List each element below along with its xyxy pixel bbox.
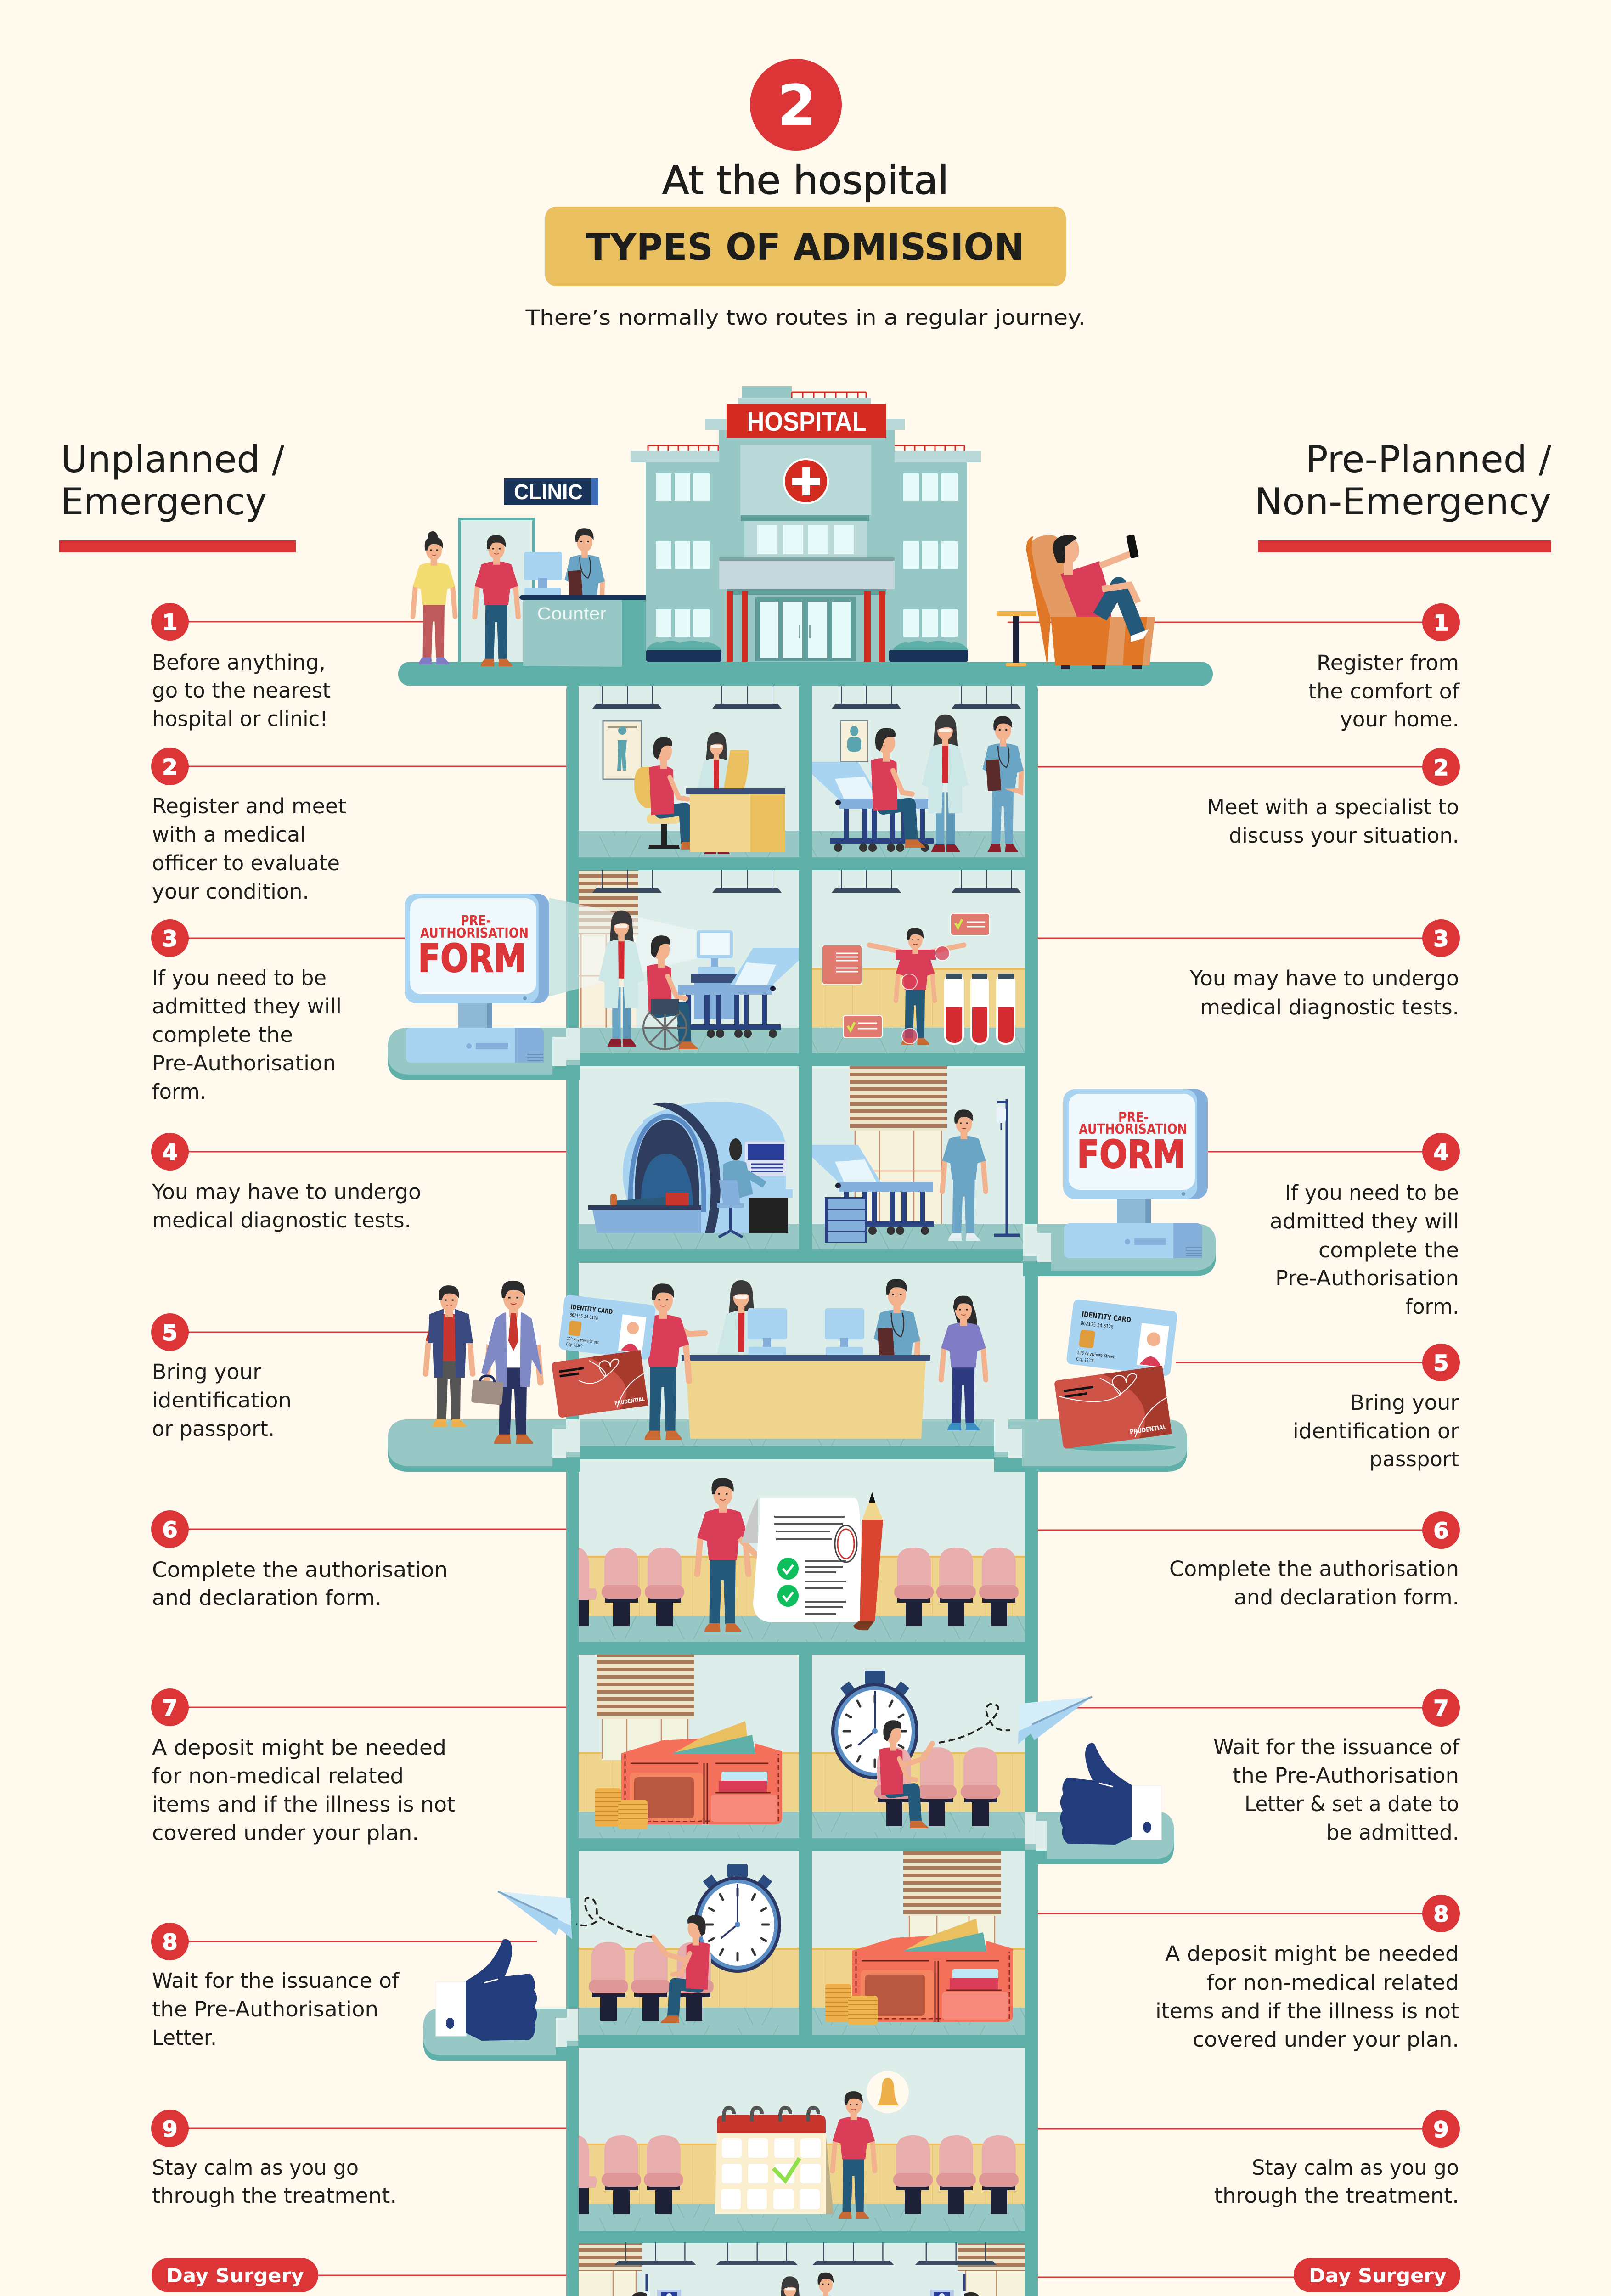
monitor bbox=[1063, 1089, 1208, 1258]
MRI machine bbox=[623, 1102, 786, 1233]
day surgery right: Day Surgery bbox=[1309, 2264, 1447, 2287]
step 4 right: form. bbox=[1405, 1294, 1459, 1319]
step 7 left: for non-medical related bbox=[152, 1764, 404, 1788]
balcony: pre-authorisation form left bbox=[388, 894, 580, 1080]
heading: pre-planned route bbox=[1255, 438, 1551, 552]
monitor on cart bbox=[691, 930, 738, 1019]
floor 9: day surgery ward bbox=[579, 2242, 1025, 2296]
bed bbox=[812, 1145, 934, 1235]
check card bottom bbox=[843, 1015, 882, 1038]
step 9 left: through the treatment. bbox=[152, 2183, 397, 2208]
floor 2 right: diagnostic tests bbox=[812, 870, 1025, 1053]
chairs left bbox=[579, 2135, 683, 2214]
highlight circles bbox=[901, 946, 950, 1044]
identity card: 123 Anywhere Street bbox=[1077, 1350, 1115, 1360]
man at clinic bbox=[475, 535, 518, 666]
desk monitors bbox=[748, 1308, 787, 1356]
check card top bbox=[951, 913, 990, 935]
left patient bed bbox=[599, 2274, 730, 2296]
doctor behind desk bbox=[717, 1280, 766, 1424]
central block bbox=[719, 430, 895, 662]
red cross bbox=[784, 459, 828, 503]
chairs bbox=[874, 1747, 1000, 1826]
identity card: 123 Anywhere Street bbox=[567, 1337, 599, 1345]
step 2 right: Meet with a specialist to bbox=[1207, 795, 1459, 819]
side wings bbox=[646, 461, 967, 662]
step 8 left: Letter. bbox=[152, 2026, 217, 2050]
step 1 right: the comfort of bbox=[1308, 679, 1460, 703]
coins bbox=[825, 1984, 878, 2025]
top roof bbox=[738, 386, 871, 407]
clock bbox=[831, 1671, 918, 1779]
counter bbox=[519, 595, 650, 667]
person with arms out bbox=[869, 928, 964, 1045]
coins bbox=[595, 1788, 648, 1829]
step 9 right: through the treatment. bbox=[1214, 2183, 1459, 2208]
nurse bbox=[565, 528, 604, 661]
clinic bbox=[413, 478, 650, 667]
man with form bbox=[697, 1478, 762, 1632]
step 3 right bbox=[1189, 919, 1460, 1019]
waiting chairs right bbox=[894, 1548, 1019, 1626]
step 2 right bbox=[1207, 748, 1460, 848]
person bbox=[1053, 535, 1149, 642]
identity card: City, 12300 bbox=[566, 1342, 583, 1349]
floor 3 left: MRI scan bbox=[579, 1066, 799, 1249]
seated man bbox=[653, 1915, 710, 2023]
hospital sign: HOSPITAL bbox=[747, 407, 867, 437]
step 4 right: admitted they will bbox=[1270, 1209, 1459, 1233]
doctor bbox=[696, 732, 737, 854]
pencil bbox=[853, 1492, 883, 1630]
step 3 right: You may have to undergo bbox=[1189, 966, 1459, 990]
waiting chairs left bbox=[579, 1548, 684, 1626]
step 7 right: 7 bbox=[1433, 1696, 1449, 1722]
identity card: City, 12300 bbox=[1076, 1356, 1095, 1364]
side roofs bbox=[631, 445, 981, 462]
lung poster bbox=[841, 721, 868, 762]
man with reminder bbox=[833, 2091, 875, 2219]
hospital building bbox=[631, 386, 981, 662]
step 2 left: with a medical bbox=[152, 822, 306, 847]
floor 1 right: specialist room bbox=[812, 686, 1025, 857]
floor 5: declaration form bbox=[579, 1459, 1025, 1642]
paper plane bbox=[1018, 1697, 1092, 1745]
doctor bbox=[771, 2276, 809, 2296]
doctor bbox=[598, 911, 644, 1047]
section number badge bbox=[750, 59, 842, 151]
floor 8: calendar and admission date bbox=[579, 2048, 1025, 2231]
central windows bbox=[741, 515, 869, 558]
step 9 left: Stay calm as you go bbox=[152, 2155, 359, 2180]
step 1 left bbox=[151, 603, 331, 731]
day surgery right bbox=[1124, 2258, 1460, 2296]
heading: unplanned route: Unplanned / bbox=[61, 438, 284, 481]
identity card: 862135 14 6128 bbox=[1080, 1320, 1114, 1330]
window and blinds bbox=[903, 1851, 1001, 1953]
heading: unplanned route: Emergency bbox=[61, 480, 267, 523]
step 7 right: Letter & set a date to bbox=[1245, 1792, 1459, 1816]
step 3 left: complete the bbox=[152, 1023, 293, 1047]
step 4 left: medical diagnostic tests. bbox=[152, 1208, 411, 1232]
red columns bbox=[727, 591, 885, 662]
clock bbox=[694, 1864, 781, 1973]
banner: types of admission bbox=[545, 207, 1066, 286]
step 5 left bbox=[151, 1313, 292, 1441]
wheelchair bbox=[643, 999, 687, 1049]
console bbox=[745, 1142, 793, 1233]
calendar bbox=[715, 2108, 834, 2214]
yellow patient chair bbox=[634, 767, 680, 849]
bell bubble bbox=[867, 2071, 909, 2113]
balcony: pre-authorisation form right bbox=[1023, 1089, 1216, 1276]
form text: PRE- bbox=[461, 913, 491, 929]
identity card bbox=[1066, 1299, 1178, 1376]
step 1 left: 1 bbox=[162, 610, 178, 636]
upper roof band bbox=[705, 419, 905, 430]
step 5 left: 5 bbox=[162, 1320, 178, 1346]
patient on table bbox=[610, 1193, 689, 1206]
step 5 right: passport bbox=[1369, 1447, 1459, 1471]
identity card: IDENTITY CARD bbox=[1081, 1310, 1132, 1324]
step 2 right: 2 bbox=[1433, 755, 1449, 781]
step 8 right: covered under your plan. bbox=[1193, 2027, 1459, 2052]
wallet bbox=[621, 1721, 782, 1824]
seated man bbox=[879, 1720, 932, 1828]
step 5 right bbox=[1293, 1344, 1460, 1471]
step 8 left: Wait for the issuance of bbox=[152, 1969, 400, 1993]
step 2 left: Register and meet bbox=[152, 794, 346, 818]
nurse bbox=[808, 2273, 843, 2296]
armchair bbox=[1026, 535, 1155, 669]
window bbox=[579, 870, 638, 1028]
step 4 left: 4 bbox=[162, 1140, 178, 1165]
man in suit bbox=[481, 1281, 542, 1444]
form document bbox=[741, 1498, 867, 1622]
step 7 right bbox=[1213, 1689, 1460, 1845]
step 4 right bbox=[1270, 1133, 1460, 1319]
form text: AUTHORISATION bbox=[1079, 1121, 1187, 1137]
floor 7 left: waiting with clock bbox=[579, 1851, 799, 2035]
patient bbox=[647, 935, 698, 1049]
window and blinds bbox=[597, 1655, 694, 1760]
step 7 left: covered under your plan. bbox=[152, 1821, 419, 1845]
step 6 right: Complete the authorisation bbox=[1169, 1557, 1459, 1581]
step 6 left: 6 bbox=[162, 1517, 178, 1543]
step 8 left: the Pre-Authorisation bbox=[152, 1997, 378, 2021]
insurance card: PRUDENTIAL bbox=[1129, 1424, 1167, 1436]
heading: pre-planned route: Pre-Planned / bbox=[1306, 438, 1551, 481]
counter: Counter bbox=[537, 604, 607, 624]
form text bbox=[1077, 1109, 1187, 1177]
side windows bbox=[656, 473, 958, 637]
operator bbox=[717, 1138, 765, 1237]
section number badge: 2 bbox=[777, 73, 816, 138]
entrance canopy bbox=[719, 557, 895, 595]
step 1 left: hospital or clinic! bbox=[152, 707, 328, 731]
nurse behind desk bbox=[874, 1279, 920, 1433]
step 4 left: You may have to undergo bbox=[152, 1180, 421, 1204]
bed bbox=[812, 762, 934, 852]
step 5 left: Bring your bbox=[152, 1360, 262, 1384]
step 4 right: If you need to be bbox=[1285, 1181, 1459, 1205]
nurse bbox=[982, 716, 1024, 852]
planters bbox=[646, 641, 968, 662]
blood tubes bbox=[944, 974, 1015, 1045]
clinic sign: CLINIC bbox=[514, 480, 583, 504]
subtitle: There’s normally two routes in a regular journey. bbox=[525, 305, 1086, 330]
step 4 left bbox=[151, 1133, 421, 1232]
step 3 right: medical diagnostic tests. bbox=[1200, 995, 1459, 1019]
insurance card bbox=[551, 1350, 648, 1418]
right patient bed bbox=[881, 2274, 1012, 2296]
step 8 right: items and if the illness is not bbox=[1155, 1999, 1459, 2023]
step 8 left bbox=[151, 1923, 400, 2050]
clinic sign bbox=[504, 478, 598, 505]
step 7 right: be admitted. bbox=[1326, 1820, 1459, 1845]
clinic door bbox=[459, 519, 534, 663]
balcony: thumbs up right bbox=[939, 1697, 1174, 1864]
insurance card bbox=[1054, 1366, 1172, 1449]
floor 3 right: recovery with IV bbox=[812, 1066, 1025, 1249]
bed bbox=[677, 948, 799, 1038]
drawer cabinet bbox=[825, 1197, 867, 1243]
day surgery left: Day Surgery bbox=[166, 2264, 304, 2287]
step 3 left: If you need to be bbox=[152, 966, 327, 990]
floor 6 left: deposit wallet bbox=[579, 1655, 799, 1838]
identity card bbox=[558, 1294, 656, 1360]
woman with watch bbox=[413, 531, 455, 664]
floor 2 left: wheelchair examination bbox=[579, 870, 799, 1053]
IV pole bbox=[994, 1099, 1020, 1235]
step 9 left: 9 bbox=[162, 2116, 178, 2142]
step 5 left: identification bbox=[152, 1388, 292, 1412]
step 9 right: Stay calm as you go bbox=[1252, 2155, 1459, 2180]
step 2 left bbox=[151, 748, 346, 904]
chairs right bbox=[893, 2135, 1019, 2214]
step 3 left: form. bbox=[152, 1080, 206, 1104]
step 3 left: 3 bbox=[162, 926, 178, 952]
tower structure bbox=[566, 680, 1038, 2296]
step 5 right: Bring your bbox=[1350, 1390, 1459, 1415]
step 8 right bbox=[1155, 1895, 1460, 2052]
desk bbox=[686, 788, 785, 852]
step 6 right: and declaration form. bbox=[1234, 1585, 1459, 1609]
balcony: identification left bbox=[388, 1281, 656, 1472]
projection beam bbox=[549, 898, 579, 996]
chairs bbox=[589, 1942, 714, 2021]
floor 1 left: consultation room bbox=[579, 686, 799, 857]
step 3 left: admitted they will bbox=[152, 994, 342, 1019]
step 7 left bbox=[151, 1688, 455, 1845]
central panel bbox=[740, 445, 871, 515]
form text: PRE- bbox=[1118, 1109, 1149, 1125]
step 8 left: 8 bbox=[162, 1930, 178, 1955]
entrance doors bbox=[755, 597, 856, 661]
form text: AUTHORISATION bbox=[420, 925, 529, 941]
window and blinds bbox=[850, 1066, 947, 1224]
clinic monitor bbox=[524, 552, 562, 596]
ward lamps bbox=[614, 2242, 997, 2265]
heading: unplanned route bbox=[59, 438, 296, 552]
dashed flight path bbox=[576, 1898, 652, 1937]
step 1 right: Register from bbox=[1317, 651, 1459, 675]
woman visitor bbox=[941, 1296, 986, 1430]
check card left bbox=[822, 945, 862, 985]
step 1 right: 1 bbox=[1433, 610, 1449, 636]
step 6 left: and declaration form. bbox=[152, 1586, 382, 1610]
card shadow bbox=[1065, 1444, 1176, 1451]
scanner table bbox=[588, 1205, 701, 1233]
step 3 left bbox=[151, 919, 342, 1104]
ground platform bbox=[398, 662, 1213, 686]
step 1 right: your home. bbox=[1340, 707, 1459, 732]
form text bbox=[418, 913, 529, 981]
step 6 right bbox=[1169, 1511, 1460, 1609]
step 3 left: Pre-Authorisation bbox=[152, 1051, 336, 1075]
form text: FORM bbox=[418, 936, 526, 981]
doctor chair headrest bbox=[724, 750, 749, 788]
insurance card: PRUDENTIAL bbox=[614, 1396, 645, 1407]
day surgery left bbox=[152, 2258, 487, 2296]
balcony: identification right bbox=[994, 1299, 1187, 1472]
thumbs up bbox=[1060, 1743, 1161, 1845]
step 1 left: go to the nearest bbox=[152, 678, 331, 703]
reception desk bbox=[682, 1355, 930, 1439]
identity card: IDENTITY CARD bbox=[570, 1303, 613, 1316]
step 7 left: 7 bbox=[162, 1695, 178, 1721]
step 4 right: complete the bbox=[1318, 1238, 1459, 1262]
paper plane bbox=[498, 1891, 572, 1939]
wallet bbox=[852, 1919, 1013, 2022]
banner: types of admission: TYPES OF ADMISSION bbox=[586, 226, 1024, 269]
step 2 right: discuss your situation. bbox=[1229, 823, 1459, 848]
step 7 right: Wait for the issuance of bbox=[1213, 1735, 1460, 1759]
identity card: 862135 14 6128 bbox=[569, 1312, 598, 1321]
step 4 right: 4 bbox=[1433, 1140, 1449, 1165]
step 7 left: A deposit might be needed bbox=[152, 1735, 446, 1760]
step 8 right: for non-medical related bbox=[1206, 1970, 1459, 1995]
floor 4: registration counter bbox=[579, 1263, 1025, 1446]
balcony: thumbs up left bbox=[423, 1891, 652, 2061]
monitor bbox=[405, 894, 549, 1063]
step 5 right: identification or bbox=[1293, 1419, 1459, 1443]
step 8 right: 8 bbox=[1433, 1902, 1449, 1927]
anatomy poster bbox=[603, 721, 642, 779]
step 9 right: 9 bbox=[1433, 2117, 1449, 2143]
connector lines bbox=[189, 622, 1422, 2277]
thumbs up bbox=[436, 1939, 537, 2041]
step 6 left bbox=[151, 1510, 448, 1610]
briefcase bbox=[471, 1376, 504, 1405]
side table bbox=[997, 611, 1036, 666]
title: At the hospital bbox=[662, 158, 949, 203]
man in jacket bbox=[426, 1285, 473, 1427]
patient at desk bbox=[637, 1283, 705, 1440]
step 4 right: Pre-Authorisation bbox=[1275, 1266, 1459, 1290]
step 1 left: Before anything, bbox=[152, 650, 326, 675]
step 3 right: 3 bbox=[1433, 926, 1449, 952]
projection beam in room bbox=[579, 904, 697, 989]
man relaxing in armchair at home bbox=[1026, 535, 1155, 669]
step 2 left: your condition. bbox=[152, 879, 309, 904]
step 7 left: items and if the illness is not bbox=[152, 1792, 455, 1817]
step 5 left: or passport. bbox=[152, 1417, 275, 1441]
step 6 right: 6 bbox=[1433, 1518, 1449, 1544]
step 5 right: 5 bbox=[1433, 1351, 1449, 1376]
step 6 left: Complete the authorisation bbox=[152, 1558, 448, 1582]
floor 7 right: deposit wallet bbox=[812, 1851, 1025, 2035]
ward windows bbox=[579, 2265, 1025, 2296]
heading: pre-planned route: Non-Emergency bbox=[1255, 480, 1551, 523]
step 1 right bbox=[1308, 603, 1460, 732]
step 9 right bbox=[1214, 2110, 1460, 2208]
dashed flight path bbox=[939, 1704, 1010, 1743]
form text: FORM bbox=[1077, 1132, 1185, 1177]
step 2 left: officer to evaluate bbox=[152, 851, 340, 875]
patient in gown bbox=[942, 1109, 986, 1241]
patient bbox=[871, 728, 925, 848]
floor 6 right: waiting with clock bbox=[812, 1655, 1025, 1838]
step 9 left bbox=[151, 2110, 397, 2208]
step 2 left: 2 bbox=[162, 754, 178, 780]
step 8 right: A deposit might be needed bbox=[1165, 1941, 1459, 1966]
step 7 right: the Pre-Authorisation bbox=[1233, 1763, 1459, 1788]
patient bbox=[649, 737, 700, 850]
doctor bbox=[922, 715, 969, 852]
